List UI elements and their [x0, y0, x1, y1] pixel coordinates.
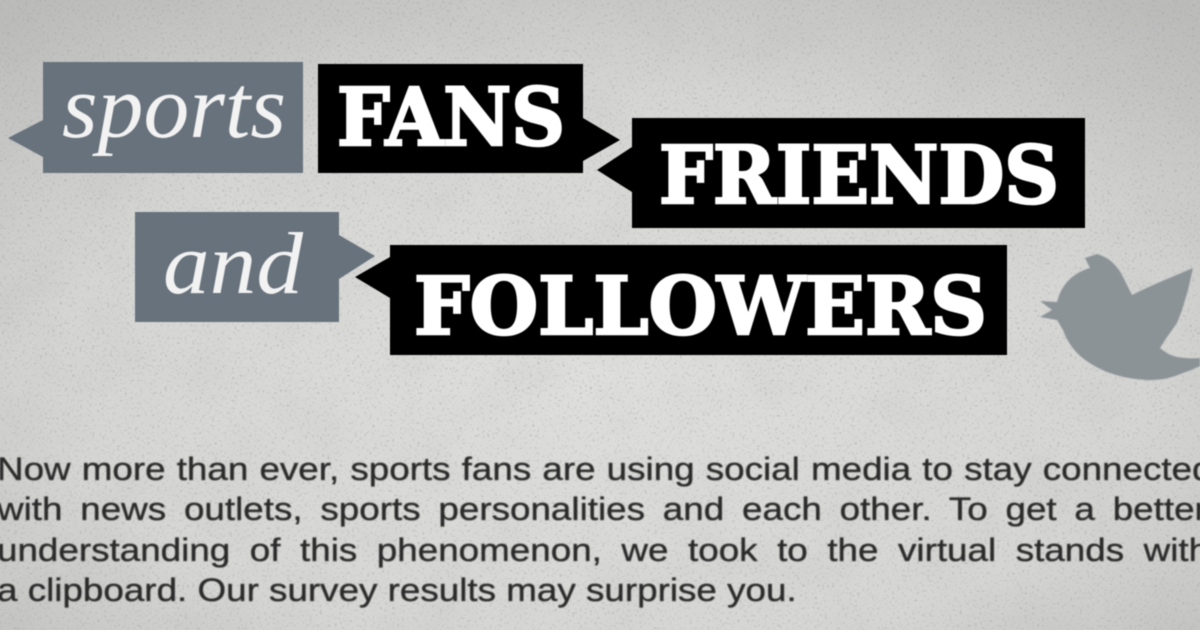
intro paragraph	[0, 451, 1200, 609]
banner: and: and	[163, 216, 304, 313]
banner: FANS: FANS	[337, 70, 565, 164]
intro paragraph: a clipboard. Our survey results may surprise you.	[0, 572, 797, 608]
banner: sports	[8, 58, 303, 173]
intro paragraph: understanding of this phenomenon, we took to the virtual stands with	[0, 532, 1200, 568]
banner: FRIENDS: FRIENDS	[659, 128, 1059, 222]
intro paragraph: Now more than ever, sports fans are using social media to stay connected	[0, 451, 1200, 487]
intro paragraph: with news outlets, sports personalities and each other. To get a better	[0, 491, 1200, 527]
banner: and	[135, 212, 375, 322]
banner: FANS	[318, 64, 620, 173]
banner: sports: sports	[62, 58, 286, 157]
banner: FOLLOWERS: FOLLOWERS	[414, 259, 987, 353]
